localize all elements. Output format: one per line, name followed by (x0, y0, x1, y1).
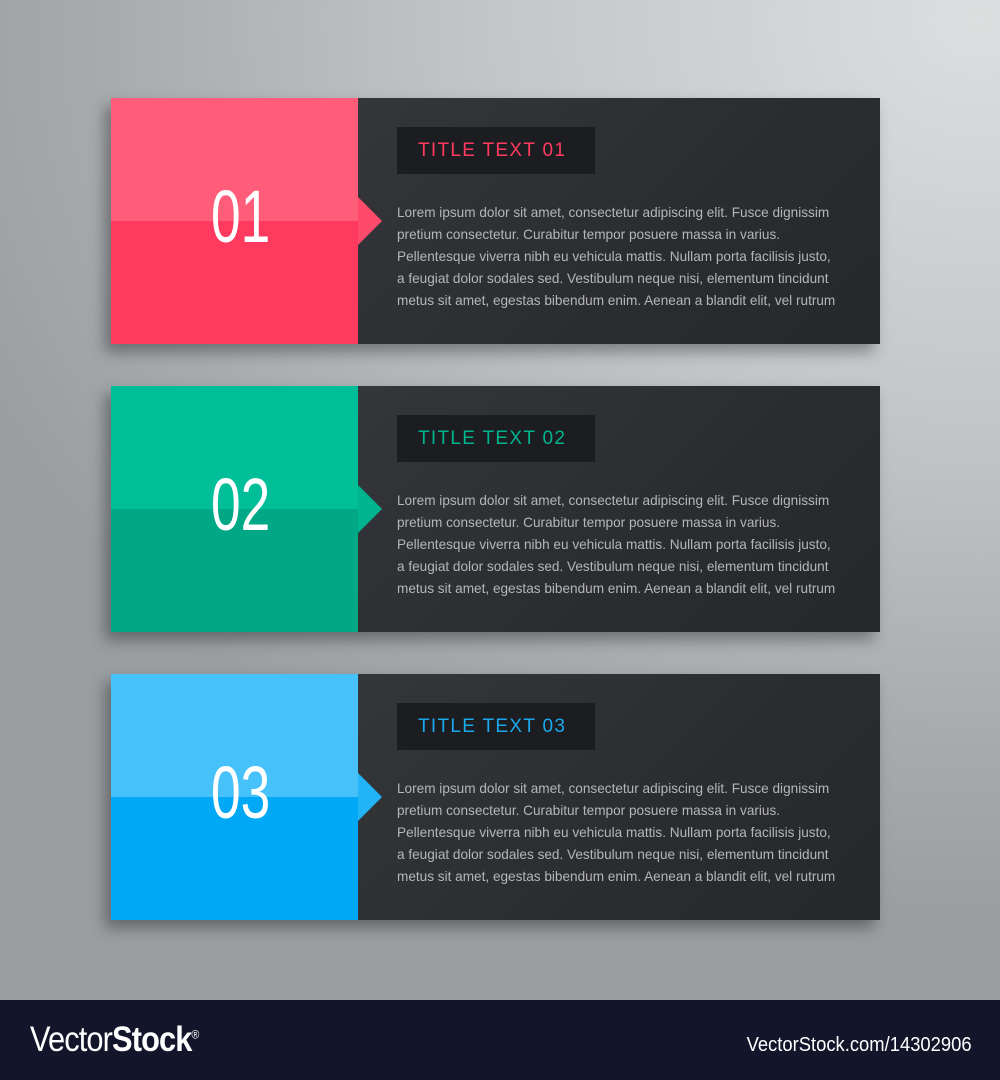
text block 03: Pellentesque viverra nibh eu vehicula mattis. Nullam porta facilisis justo, (397, 825, 831, 840)
text block 03: pretium consectetur. Curabitur tempor posuere massa in varius. (397, 803, 780, 818)
panel: pink number block (111, 98, 358, 344)
banner 03 (111, 674, 880, 920)
number 03: 03 (211, 751, 270, 834)
text block 02: metus sit amet, egestas bibendum enim. Aenean a blandit elit, vel rutrum (397, 581, 835, 596)
panel: green number block (111, 386, 358, 632)
text block 02: Pellentesque viverra nibh eu vehicula mattis. Nullam porta facilisis justo, (397, 537, 831, 552)
panel: dark content (358, 98, 880, 344)
panel: dark content (358, 674, 880, 920)
title box 03 (397, 703, 595, 750)
url: VectorStock.com/14302906 (747, 1034, 972, 1056)
text block 03: a feugiat dolor sodales sed. Vestibulum neque nisi, elementum tincidunt (397, 847, 828, 862)
text block 02 (397, 493, 835, 596)
arrow pointer (358, 485, 382, 533)
title box 01 (397, 127, 595, 174)
title box 03: TITLE TEXT 03 (418, 716, 566, 737)
banner 01 (111, 98, 880, 344)
panel: blue number block (111, 674, 358, 920)
text block 01: metus sit amet, egestas bibendum enim. Aenean a blandit elit, vel rutrum (397, 293, 835, 308)
text block 01: a feugiat dolor sodales sed. Vestibulum neque nisi, elementum tincidunt (397, 271, 828, 286)
text block 01: pretium consectetur. Curabitur tempor posuere massa in varius. (397, 227, 780, 242)
title box 01: TITLE TEXT 01 (418, 140, 566, 161)
text block 02: a feugiat dolor sodales sed. Vestibulum neque nisi, elementum tincidunt (397, 559, 828, 574)
arrow pointer (358, 197, 382, 245)
title box 02 (397, 415, 595, 462)
text block 01 (397, 205, 835, 308)
banner 02 (111, 386, 880, 632)
text block 01: Lorem ipsum dolor sit amet, consectetur adipiscing elit. Fusce dignissim (397, 205, 829, 220)
number 01: 01 (211, 175, 270, 258)
text block 03 (397, 781, 835, 884)
logo: VectorStock® (30, 1020, 198, 1059)
footer watermark bar (0, 1000, 1000, 1080)
arrow pointer (358, 773, 382, 821)
text block 02: Lorem ipsum dolor sit amet, consectetur adipiscing elit. Fusce dignissim (397, 493, 829, 508)
text block 02: pretium consectetur. Curabitur tempor posuere massa in varius. (397, 515, 780, 530)
text block 03: Lorem ipsum dolor sit amet, consectetur adipiscing elit. Fusce dignissim (397, 781, 829, 796)
number 02: 02 (211, 463, 270, 546)
title box 02: TITLE TEXT 02 (418, 428, 566, 449)
panel: dark content (358, 386, 880, 632)
text block 03: metus sit amet, egestas bibendum enim. Aenean a blandit elit, vel rutrum (397, 869, 835, 884)
text block 01: Pellentesque viverra nibh eu vehicula mattis. Nullam porta facilisis justo, (397, 249, 831, 264)
